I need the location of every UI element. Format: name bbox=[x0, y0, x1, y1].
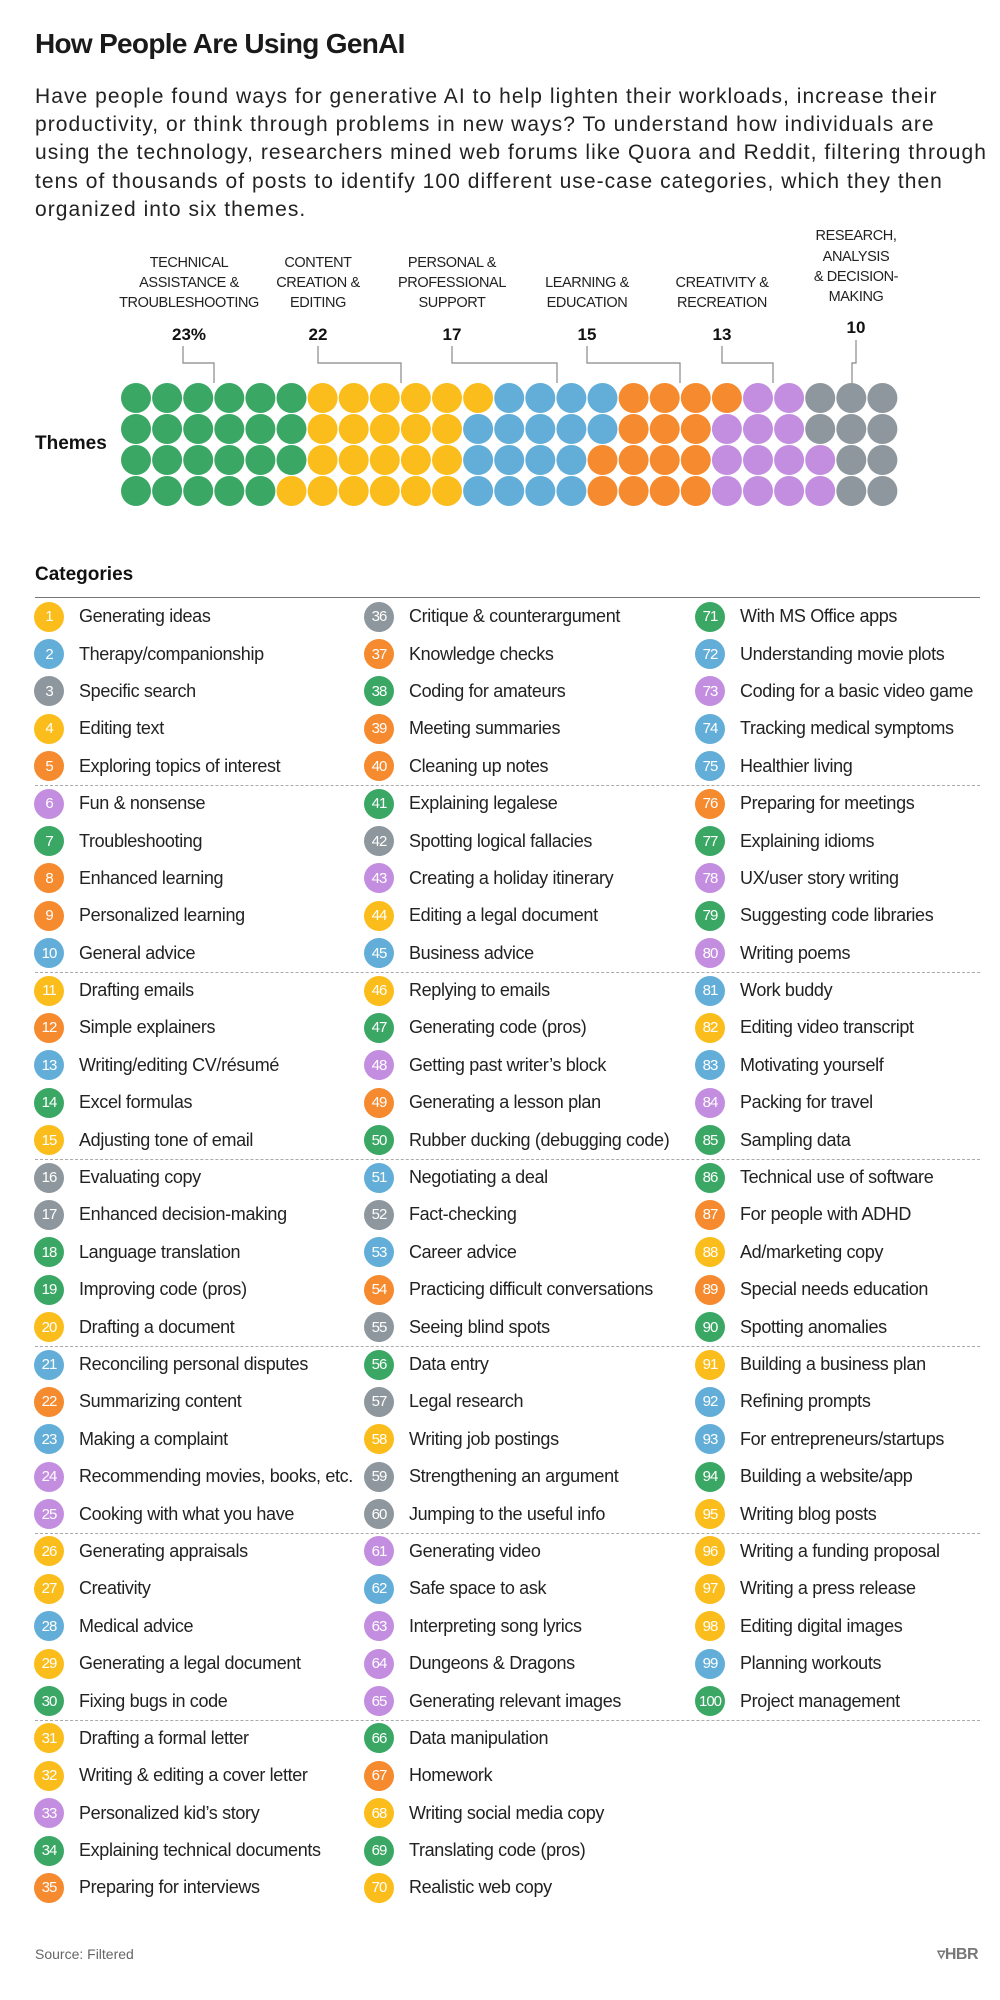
categories column 1: 13 bbox=[42, 1057, 56, 1074]
categories column 2: 40 bbox=[372, 758, 386, 775]
categories column 1: 15 bbox=[42, 1132, 56, 1149]
categories column 2: 61 bbox=[372, 1543, 386, 1560]
categories column 1: 20 bbox=[42, 1319, 56, 1336]
theme labels: CREATION & bbox=[276, 275, 361, 291]
categories column 2: Spotting logical fallacies bbox=[409, 831, 592, 851]
categories column 2: Explaining legalese bbox=[409, 793, 557, 813]
categories column 2: 38 bbox=[372, 683, 386, 700]
categories column 3: 89 bbox=[703, 1281, 717, 1298]
categories column 3: 99 bbox=[703, 1655, 717, 1672]
categories column 1: 22 bbox=[42, 1393, 56, 1410]
categories column 2: Jumping to the useful info bbox=[409, 1504, 605, 1524]
categories column 3: 93 bbox=[703, 1431, 717, 1448]
categories column 2: Replying to emails bbox=[409, 980, 550, 1000]
theme labels: LEARNING & bbox=[545, 275, 630, 291]
categories column 1: General advice bbox=[79, 943, 195, 963]
categories column 2: Data manipulation bbox=[409, 1728, 548, 1748]
categories column 3: 90 bbox=[703, 1319, 717, 1336]
categories column 3: Motivating yourself bbox=[740, 1055, 883, 1075]
categories column 2: 37 bbox=[372, 646, 386, 663]
categories column 3: 97 bbox=[703, 1580, 717, 1597]
categories column 2: 70 bbox=[372, 1879, 386, 1896]
categories column 2: 55 bbox=[372, 1319, 386, 1336]
categories column 2: 54 bbox=[372, 1281, 386, 1298]
categories column 2: 36 bbox=[372, 608, 386, 625]
categories column 2: 58 bbox=[372, 1431, 386, 1448]
dot grid bbox=[121, 383, 897, 506]
categories column 1: 32 bbox=[42, 1767, 56, 1784]
categories column 2: Rubber ducking (debugging code) bbox=[409, 1130, 669, 1150]
categories column 1: 17 bbox=[42, 1206, 56, 1223]
categories heading: Categories bbox=[35, 564, 133, 585]
categories column 3: Refining prompts bbox=[740, 1391, 870, 1411]
categories column 1: 29 bbox=[42, 1655, 56, 1672]
theme labels: SUPPORT bbox=[418, 295, 486, 311]
categories column 3: Editing video transcript bbox=[740, 1017, 914, 1037]
categories column 1: Fun & nonsense bbox=[79, 793, 205, 813]
categories column 1: Simple explainers bbox=[79, 1017, 215, 1037]
categories column 1: 27 bbox=[42, 1580, 56, 1597]
theme labels: MAKING bbox=[829, 289, 884, 305]
categories column 3: Spotting anomalies bbox=[740, 1317, 887, 1337]
categories column 1: Therapy/companionship bbox=[79, 644, 264, 664]
categories column 1: Adjusting tone of email bbox=[79, 1130, 253, 1150]
categories column 2: Interpreting song lyrics bbox=[409, 1616, 582, 1636]
intro paragraph: productivity, or think through problems in new ways? To understand how individuals are bbox=[35, 113, 935, 136]
theme labels: ASSISTANCE & bbox=[139, 275, 240, 291]
categories column 2: 60 bbox=[372, 1506, 386, 1523]
categories column 2: Generating a lesson plan bbox=[409, 1092, 601, 1112]
categories column 3: 96 bbox=[703, 1543, 717, 1560]
categories column 2: 64 bbox=[372, 1655, 386, 1672]
categories column 1: 24 bbox=[42, 1468, 56, 1485]
categories column 1: 6 bbox=[45, 795, 53, 812]
categories column 3: Ad/marketing copy bbox=[740, 1242, 883, 1262]
categories column 2: Business advice bbox=[409, 943, 534, 963]
categories column 3: Technical use of software bbox=[740, 1167, 933, 1187]
categories column 3: 95 bbox=[703, 1506, 717, 1523]
theme labels: & DECISION- bbox=[814, 269, 899, 285]
categories column 2: Dungeons & Dragons bbox=[409, 1653, 575, 1673]
categories column 1: 2 bbox=[45, 646, 53, 663]
categories column 2: Homework bbox=[409, 1765, 492, 1785]
categories column 3: 83 bbox=[703, 1057, 717, 1074]
categories column 2: Critique & counterargument bbox=[409, 606, 620, 626]
categories column 1: 9 bbox=[45, 907, 53, 924]
categories column 1: Language translation bbox=[79, 1242, 240, 1262]
categories column 3: 79 bbox=[703, 907, 717, 924]
theme labels bbox=[119, 228, 899, 311]
categories column 2: 41 bbox=[372, 795, 386, 812]
categories column 1: 12 bbox=[42, 1019, 56, 1036]
categories column 2: Meeting summaries bbox=[409, 718, 560, 738]
source footer: Source: Filtered bbox=[35, 1946, 134, 1962]
theme labels: RESEARCH, bbox=[816, 228, 896, 244]
categories column 3: Preparing for meetings bbox=[740, 793, 914, 813]
categories column 3: For people with ADHD bbox=[740, 1204, 911, 1224]
categories column 1: Enhanced learning bbox=[79, 868, 223, 888]
categories column 2: Creating a holiday itinerary bbox=[409, 868, 613, 888]
categories column 2: Data entry bbox=[409, 1354, 489, 1374]
categories column 2: 57 bbox=[372, 1393, 386, 1410]
categories column 3: Suggesting code libraries bbox=[740, 905, 933, 925]
categories column 3: 86 bbox=[703, 1169, 717, 1186]
categories column 2: 51 bbox=[372, 1169, 386, 1186]
theme percentages: 23% bbox=[172, 325, 206, 344]
categories column 3: Coding for a basic video game bbox=[740, 681, 973, 701]
categories column 2 bbox=[364, 602, 669, 1903]
categories column 1: 3 bbox=[45, 683, 53, 700]
themes chart bbox=[35, 228, 899, 506]
categories column 2: 49 bbox=[372, 1094, 386, 1111]
categories column 1: 8 bbox=[45, 870, 53, 887]
categories column 3: 92 bbox=[703, 1393, 717, 1410]
categories column 1: Making a complaint bbox=[79, 1429, 228, 1449]
categories column 1: Troubleshooting bbox=[79, 831, 202, 851]
categories column 3: Writing a press release bbox=[740, 1578, 916, 1598]
categories column 3: Healthier living bbox=[740, 756, 852, 776]
categories column 3: 71 bbox=[703, 608, 717, 625]
categories column 2: 48 bbox=[372, 1057, 386, 1074]
categories column 1: Generating a legal document bbox=[79, 1653, 301, 1673]
theme labels: CONTENT bbox=[284, 255, 352, 271]
categories column 3: 77 bbox=[703, 833, 717, 850]
categories column 1: Preparing for interviews bbox=[79, 1877, 260, 1897]
categories column 1: Personalized learning bbox=[79, 905, 245, 925]
theme labels: PROFESSIONAL bbox=[398, 275, 506, 291]
logo: HBR: ▿HBR bbox=[937, 1946, 978, 1963]
categories column 3: UX/user story writing bbox=[740, 868, 899, 888]
theme percentages bbox=[172, 318, 865, 344]
categories column 3: Editing digital images bbox=[740, 1616, 902, 1636]
categories column 2: Translating code (pros) bbox=[409, 1840, 585, 1860]
categories column 2: Getting past writer’s block bbox=[409, 1055, 606, 1075]
categories column 3: Writing poems bbox=[740, 943, 850, 963]
categories column 2: Strengthening an argument bbox=[409, 1466, 618, 1486]
categories column 1: 21 bbox=[42, 1356, 56, 1373]
categories column 3: 98 bbox=[703, 1618, 717, 1635]
title: How People Are Using GenAI bbox=[35, 28, 405, 59]
theme labels: TECHNICAL bbox=[150, 255, 229, 271]
categories column 2: Career advice bbox=[409, 1242, 517, 1262]
categories column 1: Generating ideas bbox=[79, 606, 210, 626]
categories column 1: 34 bbox=[42, 1842, 56, 1859]
categories column 1: Reconciling personal disputes bbox=[79, 1354, 308, 1374]
themes label: Themes bbox=[35, 433, 107, 454]
categories column 2: 46 bbox=[372, 982, 386, 999]
categories column 3: Project management bbox=[740, 1691, 900, 1711]
categories column 3: 73 bbox=[703, 683, 717, 700]
intro paragraph: organized into six themes. bbox=[35, 198, 306, 221]
categories column 1: 11 bbox=[42, 982, 56, 999]
categories column 2: Writing social media copy bbox=[409, 1803, 604, 1823]
intro paragraph: using the technology, researchers mined web forums like Quora and Reddit, filtering through bbox=[35, 141, 987, 164]
categories column 3: Writing a funding proposal bbox=[740, 1541, 940, 1561]
categories column 3: 88 bbox=[703, 1244, 717, 1261]
intro paragraph bbox=[35, 85, 987, 221]
categories column 3: 76 bbox=[703, 795, 717, 812]
categories column 3: Building a business plan bbox=[740, 1354, 926, 1374]
categories column 3: 100 bbox=[699, 1693, 721, 1710]
categories column 3: Sampling data bbox=[740, 1130, 851, 1150]
categories column 2: Editing a legal document bbox=[409, 905, 598, 925]
categories column 2: 67 bbox=[372, 1767, 386, 1784]
categories column 1: 1 bbox=[45, 608, 53, 625]
categories column 1: 19 bbox=[42, 1281, 56, 1298]
categories column 3: Packing for travel bbox=[740, 1092, 873, 1112]
theme labels: RECREATION bbox=[677, 295, 767, 311]
theme labels: EDITING bbox=[290, 295, 346, 311]
categories column 3: 87 bbox=[703, 1206, 717, 1223]
categories column 1: 33 bbox=[42, 1805, 56, 1822]
categories column 2: Coding for amateurs bbox=[409, 681, 565, 701]
categories column 2: 53 bbox=[372, 1244, 386, 1261]
categories column 1 bbox=[34, 602, 353, 1903]
categories column 3: 91 bbox=[703, 1356, 717, 1373]
categories column 3: For entrepreneurs/startups bbox=[740, 1429, 944, 1449]
categories column 3: 80 bbox=[703, 945, 717, 962]
categories column 2: 69 bbox=[372, 1842, 386, 1859]
categories column 1: Medical advice bbox=[79, 1616, 193, 1636]
theme percentages: 15 bbox=[578, 325, 596, 344]
categories column 2: 63 bbox=[372, 1618, 386, 1635]
categories column 2: 45 bbox=[372, 945, 386, 962]
categories column 2: 59 bbox=[372, 1468, 386, 1485]
categories column 1: Writing & editing a cover letter bbox=[79, 1765, 308, 1785]
categories column 1: Summarizing content bbox=[79, 1391, 241, 1411]
categories column 2: 68 bbox=[372, 1805, 386, 1822]
categories column 2: Safe space to ask bbox=[409, 1578, 546, 1598]
categories column 1: 5 bbox=[45, 758, 53, 775]
categories column 2: Knowledge checks bbox=[409, 644, 554, 664]
categories column 1: Creativity bbox=[79, 1578, 151, 1598]
categories column 2: 42 bbox=[372, 833, 386, 850]
categories column 2: 56 bbox=[372, 1356, 386, 1373]
categories column 3: Understanding movie plots bbox=[740, 644, 944, 664]
categories column 2: Legal research bbox=[409, 1391, 523, 1411]
categories column 1: Writing/editing CV/résumé bbox=[79, 1055, 279, 1075]
categories column 3: With MS Office apps bbox=[740, 606, 897, 626]
categories column 2: Negotiating a deal bbox=[409, 1167, 548, 1187]
theme percentages: 17 bbox=[443, 325, 461, 344]
categories column 1: 18 bbox=[42, 1244, 56, 1261]
theme percentages: 10 bbox=[847, 318, 865, 337]
theme labels: EDUCATION bbox=[547, 295, 627, 311]
categories column 1: Explaining technical documents bbox=[79, 1840, 321, 1860]
categories column 3: 81 bbox=[703, 982, 717, 999]
categories column 2: 44 bbox=[372, 907, 386, 924]
categories column 3 bbox=[695, 602, 973, 1716]
categories column 1: Fixing bugs in code bbox=[79, 1691, 227, 1711]
categories column 1: Drafting a formal letter bbox=[79, 1728, 249, 1748]
categories column 1: Cooking with what you have bbox=[79, 1504, 294, 1524]
categories column 3: Explaining idioms bbox=[740, 831, 874, 851]
leader lines bbox=[183, 340, 856, 383]
categories column 3: 85 bbox=[703, 1132, 717, 1149]
categories column 1: 28 bbox=[42, 1618, 56, 1635]
categories column 1: Editing text bbox=[79, 718, 164, 738]
categories column 2: 62 bbox=[372, 1580, 386, 1597]
categories column 2: Generating relevant images bbox=[409, 1691, 621, 1711]
categories column 3: 94 bbox=[703, 1468, 717, 1485]
theme labels: TROUBLESHOOTING bbox=[119, 295, 259, 311]
theme labels: CREATIVITY & bbox=[676, 275, 769, 291]
categories column 1: Drafting a document bbox=[79, 1317, 234, 1337]
categories column 2: 66 bbox=[372, 1730, 386, 1747]
categories column 2: 43 bbox=[372, 870, 386, 887]
intro paragraph: tens of thousands of posts to identify 100 different use-case categories, which they then bbox=[35, 170, 943, 193]
categories column 2: 65 bbox=[372, 1693, 386, 1710]
categories column 3: 72 bbox=[703, 646, 717, 663]
categories column 3: 82 bbox=[703, 1019, 717, 1036]
categories column 3: Writing blog posts bbox=[740, 1504, 876, 1524]
categories column 1: 14 bbox=[42, 1094, 56, 1111]
categories column 2: 50 bbox=[372, 1132, 386, 1149]
categories column 1: Specific search bbox=[79, 681, 196, 701]
categories column 2: 39 bbox=[372, 720, 386, 737]
categories column 1: 23 bbox=[42, 1431, 56, 1448]
categories column 2: Cleaning up notes bbox=[409, 756, 548, 776]
categories column 3: 84 bbox=[703, 1094, 717, 1111]
categories column 1: Excel formulas bbox=[79, 1092, 192, 1112]
categories column 3: Special needs education bbox=[740, 1279, 928, 1299]
categories column 2: Writing job postings bbox=[409, 1429, 559, 1449]
theme percentages: 22 bbox=[309, 325, 327, 344]
categories column 1: Exploring topics of interest bbox=[79, 756, 280, 776]
categories column 2: Fact-checking bbox=[409, 1204, 516, 1224]
intro paragraph: Have people found ways for generative AI to help lighten their workloads, increase their bbox=[35, 85, 938, 108]
theme percentages: 13 bbox=[713, 325, 731, 344]
categories column 1: 26 bbox=[42, 1543, 56, 1560]
categories column 1: 35 bbox=[42, 1879, 56, 1896]
categories column 1: Generating appraisals bbox=[79, 1541, 248, 1561]
categories column 2: 52 bbox=[372, 1206, 386, 1223]
categories column 3: 78 bbox=[703, 870, 717, 887]
categories column 1: Improving code (pros) bbox=[79, 1279, 247, 1299]
categories column 1: Drafting emails bbox=[79, 980, 194, 1000]
categories column 1: 7 bbox=[45, 833, 53, 850]
categories column 2: Realistic web copy bbox=[409, 1877, 552, 1897]
theme labels: ANALYSIS bbox=[823, 249, 889, 265]
categories column 3: Building a website/app bbox=[740, 1466, 912, 1486]
theme labels: PERSONAL & bbox=[408, 255, 497, 271]
categories column 1: 16 bbox=[42, 1169, 56, 1186]
categories column 2: 47 bbox=[372, 1019, 386, 1036]
categories column 1: 30 bbox=[42, 1693, 56, 1710]
categories column 3: Work buddy bbox=[740, 980, 832, 1000]
categories column 1: 4 bbox=[45, 720, 53, 737]
categories column 3: Tracking medical symptoms bbox=[740, 718, 954, 738]
categories column 3: 75 bbox=[703, 758, 717, 775]
categories column 1: Personalized kid’s story bbox=[79, 1803, 259, 1823]
categories column 1: 10 bbox=[42, 945, 56, 962]
categories column 2: Practicing difficult conversations bbox=[409, 1279, 653, 1299]
categories column 2: Generating code (pros) bbox=[409, 1017, 586, 1037]
categories column 1: Enhanced decision-making bbox=[79, 1204, 287, 1224]
categories column 3: 74 bbox=[703, 720, 717, 737]
categories column 1: Recommending movies, books, etc. bbox=[79, 1466, 353, 1486]
categories column 2: Generating video bbox=[409, 1541, 540, 1561]
categories column 2: Seeing blind spots bbox=[409, 1317, 550, 1337]
categories column 1: Evaluating copy bbox=[79, 1167, 201, 1187]
categories column 1: 31 bbox=[42, 1730, 56, 1747]
categories column 3: Planning workouts bbox=[740, 1653, 881, 1673]
categories column 1: 25 bbox=[42, 1506, 56, 1523]
